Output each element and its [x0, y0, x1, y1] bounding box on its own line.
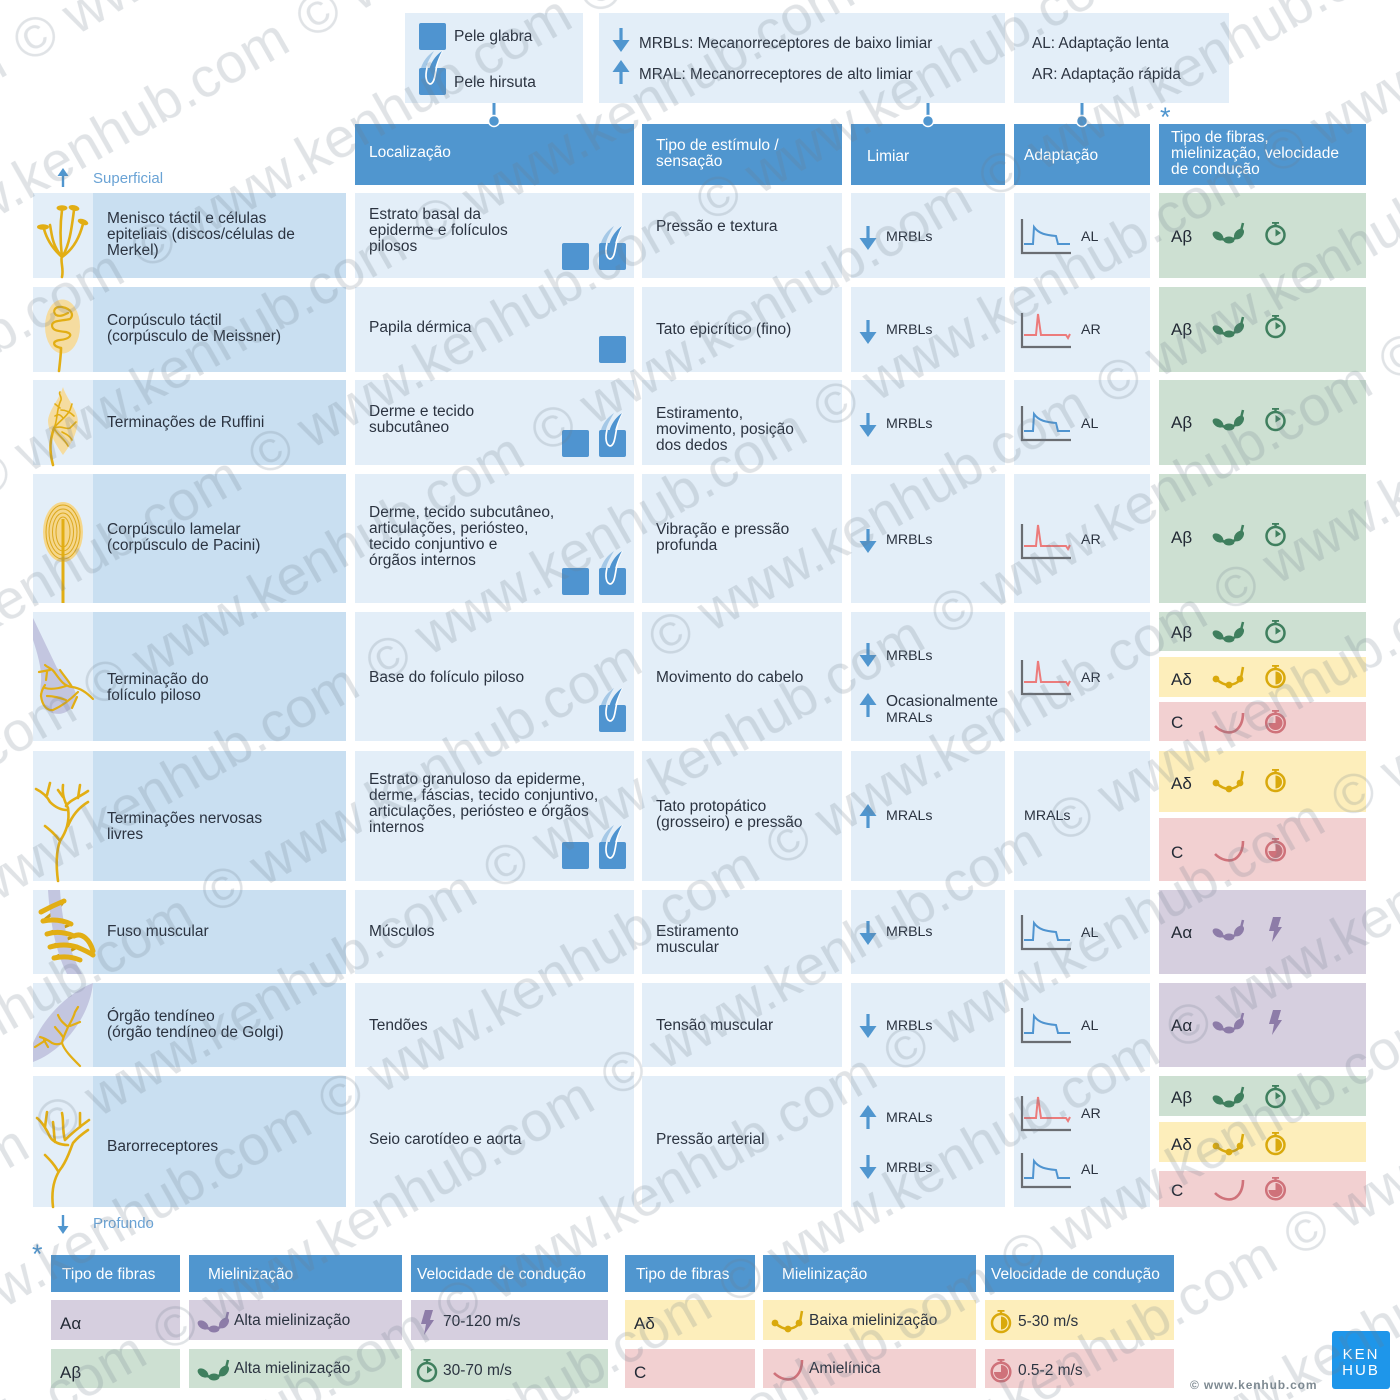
adaptation chart [1022, 313, 1071, 347]
adaptation label: AR [1081, 670, 1101, 686]
icon: muscle spindle [41, 890, 93, 974]
fibre cell: C [1159, 702, 1366, 741]
A-beta row: Aβ [60, 1363, 81, 1382]
adaptation label: AL [1081, 416, 1098, 432]
icon: hairy skin [599, 825, 626, 869]
row: muscle spindle [33, 890, 1366, 974]
threshold arrow [860, 693, 876, 717]
adaptation chart [1022, 524, 1071, 558]
stimulus text: Tato protopático [656, 798, 766, 815]
icon: Ruffini ending [48, 387, 78, 465]
row: hair follicle [33, 612, 1366, 741]
C row [625, 1349, 1174, 1388]
A-alpha row: Alta mielinização [234, 1312, 350, 1329]
A-beta row: Alta mielinização [234, 1360, 350, 1377]
threshold arrow [860, 529, 876, 553]
table header: fibre type [625, 1255, 755, 1292]
threshold text: MRBLs [886, 648, 933, 664]
threshold text: MRBLs [886, 924, 933, 940]
icon: stopwatch [1266, 315, 1284, 337]
receptor name: (órgão tendíneo de Golgi) [107, 1024, 284, 1041]
stimulus text: Estiramento, [656, 405, 743, 422]
receptor name: Fuso muscular [107, 923, 209, 940]
row: Ruffini [33, 380, 1366, 465]
header: fibres [1159, 124, 1366, 185]
receptor name: Barorreceptores [107, 1138, 218, 1155]
receptor name: Merkel) [107, 242, 159, 259]
location text: articulações, periósteo e órgãos [369, 803, 589, 820]
location text: pilosos [369, 238, 417, 255]
icon: myelin [1211, 525, 1246, 546]
adaptation label: AL [1081, 1018, 1098, 1034]
connector: threshold legend [922, 103, 934, 126]
location text: Estrato basal da [369, 206, 481, 223]
threshold text: MRBLs [886, 416, 933, 432]
receptor name: Corpúsculo táctil [107, 312, 222, 329]
header: location: Localização [369, 144, 451, 161]
threshold text: MRBLs [886, 229, 933, 245]
stimulus text: Pressão e textura [656, 218, 778, 235]
fibre type: Aα [1171, 923, 1192, 942]
icon: hairy skin [419, 51, 446, 95]
location text: derme, fáscias, tecido conjuntivo, [369, 787, 598, 804]
table header: velocity: Velocidade de condução [991, 1266, 1160, 1283]
stimulus text: Vibração e pressão [656, 521, 789, 538]
threshold text: MRBLs [886, 532, 933, 548]
logo: HUB [1342, 1362, 1380, 1379]
header: stimulus: sensação [656, 153, 722, 170]
threshold arrow [860, 226, 876, 250]
table header: velocity [985, 1255, 1174, 1292]
icon: hair follicle ending [33, 618, 93, 714]
asterisk: fibres header: * [1160, 102, 1171, 132]
icon: myelin [1211, 920, 1246, 940]
threshold text: MRALs [886, 710, 933, 726]
threshold text: MRBLs [886, 1160, 933, 1176]
icon: glabrous skin [599, 336, 626, 363]
header: fibres: mielinização, velocidade [1171, 145, 1339, 162]
legend label: low threshold: MRBLs: Mecanorreceptores de baixo limiar [639, 35, 932, 52]
location text: Tendões [369, 1017, 428, 1034]
threshold text: Ocasionalmente [886, 693, 998, 710]
icon: high threshold arrow [612, 60, 630, 84]
icon: hairy skin [599, 413, 626, 457]
row: Merkel [33, 193, 1366, 278]
icon: glabrous skin [562, 842, 589, 869]
header: fibres: Tipo de fibras, [1171, 129, 1269, 146]
legend label: hairy skin: Pele hirsuta [454, 74, 536, 91]
threshold text: MRALs [886, 1110, 933, 1126]
stimulus text: muscular [656, 939, 719, 956]
legend label: slow adaptation: AL: Adaptação lenta [1032, 35, 1169, 52]
A-beta row [51, 1349, 608, 1388]
header: stimulus: Tipo de estímulo / [656, 137, 779, 154]
threshold arrow [860, 413, 876, 437]
fibre type: Aβ [1171, 320, 1192, 339]
header: adaptation [1014, 124, 1150, 185]
location text: Derme e tecido [369, 403, 474, 420]
icon: tendon organ [33, 983, 93, 1066]
legend label: rapid adaptation: AR: Adaptação rápida [1032, 66, 1181, 83]
row: baroreceptors [33, 1076, 1366, 1207]
row: free nerve endings [33, 751, 1366, 881]
legend label: glabrous skin: Pele glabra [454, 28, 533, 45]
icon: lightning speed [1269, 917, 1282, 942]
fibre cell: A-beta: Aβ [1171, 623, 1192, 642]
fibre cell: A-delta: Aδ [1171, 774, 1192, 793]
A-delta row: 5-30 m/s [1018, 1313, 1079, 1330]
logo [1332, 1331, 1390, 1389]
legend: skin type [405, 13, 583, 103]
fibre type: Aβ [1171, 413, 1192, 432]
fibre cell: C [1159, 1171, 1366, 1207]
header: adaptation: Adaptação [1024, 147, 1098, 164]
fibre cell: A-delta [1159, 1122, 1366, 1162]
deep marker [58, 1215, 154, 1234]
table header: fibre type [51, 1255, 180, 1292]
table header: myelination [763, 1255, 976, 1292]
table header: fibre type: Tipo de fibras [62, 1266, 156, 1283]
fibre cell: C: C [1171, 843, 1183, 862]
A-delta row: Aδ [634, 1314, 655, 1333]
icon: myelin [1211, 317, 1246, 338]
header: fibres: de condução [1171, 161, 1260, 178]
icon: stopwatch [1266, 523, 1284, 545]
adaptation chart [1022, 1096, 1071, 1130]
fibre cell: A-delta: Aδ [1171, 670, 1192, 689]
receptor name: (corpúsculo de Meissner) [107, 328, 281, 345]
table header: myelination: Mielinização [208, 1266, 293, 1283]
location text: Base do folículo piloso [369, 669, 524, 686]
icon: hairy skin [599, 551, 626, 595]
table header: myelination: Mielinização [782, 1266, 867, 1283]
threshold arrow [860, 1014, 876, 1038]
header: location [355, 124, 634, 185]
table header: myelination [189, 1255, 402, 1292]
connector: skin legend [488, 103, 500, 126]
threshold text: MRBLs [886, 1018, 933, 1034]
threshold arrow [860, 1105, 876, 1129]
stimulus text: (grosseiro) e pressão [656, 814, 802, 831]
location text: Músculos [369, 923, 435, 940]
location text: articulações, periósteo, [369, 520, 528, 537]
icon: myelin [1211, 1013, 1246, 1034]
C row: 0.5-2 m/s [1018, 1362, 1083, 1379]
location text: órgãos internos [369, 552, 476, 569]
adaptation chart [1022, 915, 1071, 949]
icon: glabrous skin [419, 23, 446, 50]
adaptation chart [1022, 1008, 1071, 1042]
fibre cell: C: C [1171, 713, 1183, 732]
fibre cell: A-beta: Aβ [1171, 1088, 1192, 1107]
icon: lightning speed [1269, 1010, 1282, 1035]
C row: C [634, 1363, 646, 1382]
row: Pacini [33, 474, 1366, 603]
icon: baroreceptor [37, 1112, 89, 1207]
A-beta row: 30-70 m/s [443, 1362, 512, 1379]
header: stimulus [642, 124, 842, 185]
fibre cell: A-delta [1159, 657, 1366, 697]
icon: glabrous skin [562, 243, 589, 270]
icon: hairy skin [599, 688, 626, 732]
A-alpha row: 70-120 m/s [443, 1313, 521, 1330]
icon: stopwatch [1266, 222, 1284, 244]
header row [355, 124, 1366, 185]
receptor name: Terminações de Ruffini [107, 414, 264, 431]
threshold arrow [860, 804, 876, 828]
stimulus text: Estiramento [656, 923, 739, 940]
legend: thresholds [599, 13, 1005, 103]
stimulus text: Tato epicrítico (fino) [656, 321, 791, 338]
location text: Seio carotídeo e aorta [369, 1131, 522, 1148]
location text: Papila dérmica [369, 319, 472, 336]
row: Golgi tendon organ [33, 983, 1366, 1067]
fibre table: A-alpha and A-beta [51, 1255, 608, 1388]
stimulus text: movimento, posição [656, 421, 794, 438]
icon: free nerve ending [36, 783, 88, 881]
icon: Pacinian corpuscle [43, 502, 83, 603]
table header: fibre type: Tipo de fibras [636, 1266, 730, 1283]
location text: internos [369, 819, 424, 836]
icon: Meissner corpuscle [45, 300, 80, 371]
threshold arrow [860, 320, 876, 344]
fibre cell: A-delta: Aδ [1171, 1135, 1192, 1154]
C row: Amielínica [809, 1360, 881, 1377]
legend: adaptation [1014, 13, 1229, 103]
stimulus text: profunda [656, 537, 718, 554]
threshold arrow [860, 921, 876, 945]
threshold arrow [860, 1155, 876, 1179]
copyright text: © www.kenhub.com [1190, 1378, 1317, 1392]
icon: glabrous skin [562, 568, 589, 595]
superficial marker: Superficial [93, 170, 163, 187]
fibre type: Aβ [1171, 227, 1192, 246]
row: Meissner [33, 287, 1366, 372]
location text: subcutâneo [369, 419, 449, 436]
threshold text: MRALs [886, 808, 933, 824]
stimulus text: dos dedos [656, 437, 728, 454]
icon: glabrous skin [562, 430, 589, 457]
fibre cell: C [1159, 818, 1366, 881]
receptor name: Terminações nervosas [107, 810, 262, 827]
stimulus text: Tensão muscular [656, 1017, 773, 1034]
location text: epiderme e folículos [369, 222, 508, 239]
legend label: high threshold: MRAL: Mecanorreceptores de alto limiar [639, 66, 913, 83]
receptor name: (corpúsculo de Pacini) [107, 537, 260, 554]
fibre cell: A-beta [1159, 1076, 1366, 1116]
fibre cell: C: C [1171, 1181, 1183, 1200]
fibre cell: A-beta [1159, 612, 1366, 651]
fibre cell: A-delta [1159, 751, 1366, 812]
receptor name: folículo piloso [107, 687, 201, 704]
table header: velocity: Velocidade de condução [417, 1266, 586, 1283]
header: threshold: Limiar [867, 148, 909, 165]
receptor name: livres [107, 826, 143, 843]
receptor name: Órgão tendíneo [107, 1008, 215, 1025]
icon: myelin [1211, 223, 1246, 244]
icon: hairy skin [599, 226, 626, 270]
adaptation label: AL [1081, 229, 1098, 245]
A-delta row [625, 1300, 1174, 1340]
asterisk: fibre table: * [32, 1239, 43, 1269]
location text: Estrato granuloso da epiderme, [369, 771, 585, 788]
receptor name: Terminação do [107, 671, 209, 688]
A-alpha row: Aα [60, 1314, 81, 1333]
adaptation chart [1022, 1153, 1071, 1187]
location text: tecido conjuntivo e [369, 536, 497, 553]
adaptation label: AR [1081, 322, 1101, 338]
threshold text: MRBLs [886, 322, 933, 338]
stimulus text: Pressão arterial [656, 1131, 765, 1148]
adaptation label: AL [1081, 925, 1098, 941]
location text: Derme, tecido subcutâneo, [369, 504, 554, 521]
icon: myelin [1211, 410, 1246, 430]
adaptation label: AL [1081, 1162, 1098, 1178]
fibre type: Aα [1171, 1016, 1192, 1035]
adaptation chart [1022, 219, 1071, 253]
icon: low threshold arrow [612, 28, 630, 52]
header: threshold [851, 124, 1005, 185]
threshold arrow [860, 643, 876, 667]
logo: KEN [1343, 1346, 1379, 1363]
adaptation chart [1022, 406, 1071, 440]
icon: stopwatch [1266, 408, 1284, 430]
adaptation label: AR [1081, 1106, 1101, 1122]
A-delta row: Baixa mielinização [809, 1312, 937, 1329]
fibre table: A-delta and C [625, 1255, 1174, 1388]
deep marker: Profundo [93, 1215, 154, 1232]
A-alpha row [51, 1300, 608, 1340]
receptor name: epiteliais (discos/células de [107, 226, 295, 243]
table header: velocity [411, 1255, 608, 1292]
adaptation text: MRALs [1024, 808, 1071, 824]
adaptation chart [1022, 660, 1071, 694]
fibre type: Aβ [1171, 528, 1192, 547]
icon: Merkel nerve ending [37, 204, 89, 277]
stimulus text: Movimento do cabelo [656, 669, 803, 686]
receptor name: Corpúsculo lamelar [107, 521, 241, 538]
receptor name: Menisco táctil e células [107, 210, 267, 227]
superficial marker [58, 168, 163, 187]
connector: adaptation legend [1076, 103, 1088, 126]
adaptation label: AR [1081, 532, 1101, 548]
